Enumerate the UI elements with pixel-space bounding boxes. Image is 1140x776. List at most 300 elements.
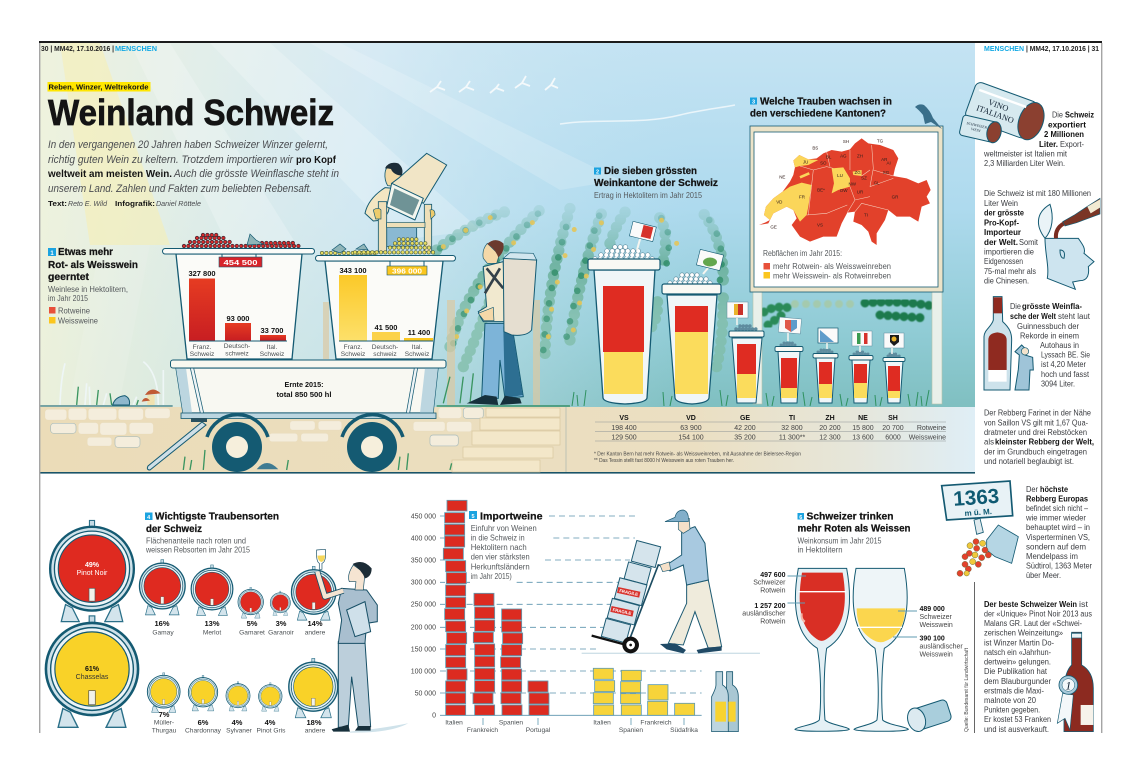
y axis labels: 450 000 bbox=[411, 514, 436, 520]
byline: Text: bbox=[48, 199, 67, 208]
barrel labels bbox=[76, 562, 326, 734]
heading 5: Hektolitern nach bbox=[471, 543, 527, 552]
text: highest vineyard: Südtirol, 1363 Meter bbox=[1026, 562, 1092, 570]
glass callouts: Weisswein bbox=[920, 652, 953, 658]
heading 2: Weinkantone der Schweiz bbox=[594, 177, 718, 189]
kicker: Reben, Winzer, Weltrekorde bbox=[48, 82, 148, 92]
glass callouts: 1 257 200 bbox=[754, 603, 786, 610]
glass callouts: 489 000 bbox=[920, 606, 945, 613]
grass under cups bbox=[572, 390, 929, 406]
icon: altitude sign with grapes: 1363 bbox=[953, 485, 1000, 511]
crate axis labels: Portugal bbox=[526, 727, 551, 734]
title: Weinland Schweiz bbox=[48, 92, 334, 133]
y axis labels: 0 bbox=[432, 712, 436, 720]
map of Switzerland: OW bbox=[840, 188, 848, 193]
intro text: weltweit am meisten Wein. bbox=[47, 168, 172, 180]
text: largest bottle: sche der Welt bbox=[1010, 312, 1056, 321]
sky background bbox=[40, 43, 975, 409]
barrel labels: 49% bbox=[85, 562, 100, 569]
map of Switzerland: ZH bbox=[857, 154, 863, 159]
chart: red wine bucket: 33 700 bbox=[261, 326, 283, 335]
text: smallest vineyard bbox=[984, 408, 1094, 466]
chart: white wine bucket: Deutsch- bbox=[372, 344, 398, 351]
table: canton yields: 154 100 bbox=[678, 434, 704, 442]
birds bbox=[430, 76, 558, 93]
source note: Quelle: Bundesamt für Landwirtschaft bbox=[964, 647, 970, 732]
heading 2: Die sieben grössten bbox=[604, 165, 697, 177]
glass callouts bbox=[742, 572, 963, 658]
crate axis labels: Frankreich bbox=[467, 727, 498, 734]
icon: altitude sign with grapes bbox=[942, 481, 1018, 576]
text: smallest vineyard: und notariell beglaubigt ist. bbox=[984, 457, 1074, 466]
text: per capita importer bbox=[984, 189, 1091, 286]
map of Switzerland: GL bbox=[874, 180, 880, 185]
table: canton yields: NE bbox=[858, 415, 868, 422]
table: canton yields: VD bbox=[686, 415, 696, 422]
heading 1: Rot- als Weisswein bbox=[48, 259, 138, 271]
cup: VD bbox=[662, 249, 724, 404]
icon: open head with wine bottle bbox=[1038, 198, 1100, 289]
chart: red wine bucket: 327 800 bbox=[188, 269, 216, 278]
text: smallest vineyard: von Saillon VS gilt mit 1,67 Qua- bbox=[984, 418, 1088, 428]
y axis gridlines bbox=[440, 516, 702, 715]
barrel labels: Müller- bbox=[154, 720, 174, 726]
text: export: weltmeister ist Italien mit bbox=[983, 150, 1068, 158]
text: export: 2,3 Milliarden Liter Wein. bbox=[984, 159, 1065, 168]
text: best Swiss wine bbox=[984, 600, 1092, 734]
glass callouts: Rotwein bbox=[760, 588, 786, 594]
byline: Daniel Röttele bbox=[156, 199, 201, 208]
text: export: 2 Millionen bbox=[1044, 130, 1084, 139]
table: canton yields: VS bbox=[619, 415, 629, 422]
winegrower with back basket bbox=[467, 240, 537, 405]
chart: red wine bucket: 454 500 bbox=[224, 258, 258, 267]
table: canton yields: 12 300 bbox=[819, 434, 841, 442]
text: best Swiss wine: Der beste Schweizer Wein bbox=[984, 600, 1077, 609]
map of Switzerland: SH bbox=[843, 139, 849, 144]
intro text bbox=[47, 139, 339, 195]
barrel labels: Garanoir bbox=[268, 630, 295, 636]
chart: wine canton cups bbox=[588, 221, 905, 404]
page frame and running heads: | MM42, 17.10.2016 | 31 bbox=[1026, 46, 1099, 53]
vertical divider bbox=[973, 582, 976, 733]
text: largest bottle: Die bbox=[1010, 302, 1021, 311]
icon: bird bbox=[915, 104, 942, 129]
crate axis labels: Italien bbox=[445, 720, 463, 726]
heading 4 bbox=[145, 510, 279, 554]
intro text: unserem Land. Zahlen und Fakten zum beliebten Rebensaft. bbox=[48, 183, 312, 195]
icon: award-winning bottle bbox=[1057, 632, 1093, 732]
barrel labels: Thurgau bbox=[152, 728, 177, 734]
table: canton yields: 20 700 bbox=[882, 425, 904, 432]
text: best Swiss wine: natsch ein «Jahrhun- bbox=[984, 648, 1051, 657]
map of Switzerland: TG bbox=[877, 138, 884, 143]
text: best Swiss wine: ist Winzer Martin Do- bbox=[984, 638, 1054, 648]
text: export bbox=[983, 110, 1094, 168]
byline: Reto E. Wild bbox=[68, 199, 108, 208]
text: best Swiss wine: ist bbox=[1079, 600, 1089, 609]
barrel labels: Chardonnay bbox=[185, 728, 222, 734]
icon: corks: SCHWEIZER bbox=[966, 121, 988, 130]
heading 3: 3 bbox=[752, 100, 755, 106]
text: export: exportiert bbox=[1048, 120, 1086, 130]
grape heaps bbox=[184, 234, 375, 253]
text: largest bottle: Guinnessbuch der bbox=[1017, 322, 1079, 331]
text: smallest vineyard: kleinster Rebberg der Welt, bbox=[995, 438, 1094, 446]
trailer: Ernte 2015: bbox=[284, 380, 324, 389]
text: best Swiss wine: der «Unique» Pinot Noir 2013 aus bbox=[984, 610, 1092, 618]
icon: wine bottles bbox=[712, 672, 738, 732]
heading 5: in die Schweiz in bbox=[471, 534, 525, 543]
text: best Swiss wine: Die Publikation hat bbox=[984, 667, 1048, 676]
text: smallest vineyard: der im Grundbuch eingetragen bbox=[984, 448, 1087, 456]
heading 2: 2 bbox=[596, 170, 599, 176]
map of Switzerland: UR bbox=[857, 189, 864, 194]
text: smallest vineyard: als bbox=[984, 438, 994, 446]
chart: white wine bucket: schweiz bbox=[373, 351, 397, 358]
chart: red wine bucket: Ital. bbox=[267, 344, 277, 351]
glass callouts: ausländischer bbox=[920, 644, 963, 650]
heading 6: 6 bbox=[799, 515, 802, 521]
text: best Swiss wine: zerischen Weinzeitung» bbox=[984, 628, 1064, 638]
map of Switzerland: TI bbox=[864, 213, 868, 218]
heading 5: 5 bbox=[471, 514, 475, 520]
heading 1: 1 bbox=[50, 251, 54, 257]
intro text: Auch die grösste Weinflasche steht in bbox=[173, 168, 339, 180]
red wine barrels bbox=[50, 520, 336, 622]
glass callouts: 390 100 bbox=[920, 636, 945, 642]
map of Switzerland: BS bbox=[812, 145, 818, 150]
heading 6: in Hektolitern bbox=[798, 546, 842, 554]
table: canton yields: 13 600 bbox=[852, 434, 874, 442]
text: largest bottle: hoch und fasst bbox=[1041, 370, 1090, 379]
heading 1: geerntet bbox=[48, 271, 89, 283]
icon: altitude sign with grapes: m ü. M. bbox=[964, 507, 992, 518]
y axis labels: 400 000 bbox=[411, 536, 436, 542]
text: highest vineyard: Visperterminen VS, bbox=[1026, 533, 1090, 542]
map of Switzerland: AI bbox=[887, 160, 891, 165]
barrel labels: andere bbox=[305, 728, 326, 734]
crate axis labels: Spanien bbox=[619, 727, 643, 734]
table: canton yields: 35 200 bbox=[734, 434, 756, 442]
barrel labels: Gamaret bbox=[239, 630, 265, 636]
map of Switzerland: NE bbox=[779, 174, 785, 179]
glass callouts: 497 600 bbox=[760, 572, 786, 579]
barrel labels: 18% bbox=[306, 718, 322, 727]
text: highest vineyard: sondern auf dem bbox=[1026, 542, 1086, 552]
chart: red wine bucket: schweiz bbox=[225, 350, 249, 358]
text: smallest vineyard: dratmeter und drei Rebstöcken bbox=[984, 428, 1087, 437]
page frame and running heads: 30 | MM42, 17.10.2016 | bbox=[41, 46, 114, 53]
text: best Swiss wine: Punkten gegeben. bbox=[984, 706, 1040, 714]
chart: white wine bucket: Schweiz bbox=[341, 351, 365, 358]
map of Switzerland: BL bbox=[826, 154, 832, 159]
heading 1: Weinlese in Hektolitern, bbox=[48, 285, 128, 294]
heading 3 bbox=[750, 96, 892, 120]
intro text: In den vergangenen 20 Jahren haben Schweizer Winzer gelernt, bbox=[48, 139, 328, 151]
chart: white wine bucket: 11 400 bbox=[408, 328, 430, 337]
text: highest vineyard bbox=[1025, 485, 1092, 580]
text: best Swiss wine: erstmals die Maxi- bbox=[984, 686, 1044, 696]
glass callouts: Rotwein bbox=[760, 618, 786, 626]
text: largest bottle: ist 4,20 Meter bbox=[1041, 360, 1086, 369]
text: highest vineyard: höchste bbox=[1040, 485, 1069, 494]
heading 4: der Schweiz bbox=[146, 523, 202, 535]
text: highest vineyard: Rebberg Europas bbox=[1026, 494, 1089, 504]
table: canton yields: Rotweine bbox=[917, 425, 946, 432]
crate axis labels: Italien bbox=[593, 720, 611, 726]
heading 5: Importweine bbox=[480, 510, 543, 522]
red wine glass bbox=[795, 568, 850, 731]
map of Switzerland: SZ bbox=[861, 175, 867, 180]
y axis labels: 50 000 bbox=[415, 690, 436, 698]
barrel labels: Pinot Gris bbox=[257, 728, 286, 734]
barrel labels: 14% bbox=[307, 619, 323, 628]
map of Switzerland: ZG bbox=[855, 170, 861, 175]
map of Switzerland: SG bbox=[883, 170, 890, 175]
y axis labels: 350 000 bbox=[411, 558, 436, 564]
map of Switzerland: FR bbox=[799, 194, 806, 199]
byline bbox=[48, 199, 201, 208]
delivery man with hand truck: FRAGILE bbox=[612, 607, 632, 616]
text: highest vineyard: Mendelpass im bbox=[1026, 552, 1078, 561]
panel: consumption glasses bbox=[742, 510, 963, 734]
table: canton yields: Weissweine bbox=[909, 434, 946, 442]
barrel labels: Pinot Noir bbox=[77, 570, 108, 577]
heading 6: Weinkonsum im Jahr 2015 bbox=[798, 536, 882, 546]
barrel labels: Sylvaner bbox=[226, 728, 253, 734]
wooden vine posts bbox=[323, 300, 540, 405]
panel: imports chart bbox=[411, 500, 760, 734]
chart: white wine bucket: Ital. bbox=[412, 344, 422, 351]
text: highest vineyard: über Meer. bbox=[1026, 571, 1061, 580]
table: canton yields: 63 900 bbox=[680, 425, 702, 432]
icon: largest bottle with man bbox=[984, 297, 1033, 390]
map of Switzerland: SO bbox=[820, 161, 827, 166]
chart: white wine bucket: 41 500 bbox=[375, 323, 397, 332]
text: export: Export- bbox=[1060, 140, 1084, 149]
text: best Swiss wine: dem Blauburgunder bbox=[984, 677, 1051, 686]
vineyard rows bbox=[437, 205, 723, 367]
crate axis labels: Südafrika bbox=[670, 727, 698, 734]
heading 1 bbox=[48, 246, 138, 326]
text: per capita importer: 75-mal mehr als bbox=[984, 267, 1036, 276]
y axis labels: 100 000 bbox=[411, 668, 436, 676]
glass callouts: Schweizer bbox=[753, 580, 786, 586]
cup: ZH bbox=[813, 328, 838, 403]
text: largest bottle: Lyssach BE. Sie bbox=[1041, 350, 1090, 360]
map of Switzerland: BE* bbox=[817, 187, 825, 192]
map of Switzerland: AG bbox=[840, 154, 847, 159]
map of Switzerland: GE bbox=[770, 225, 777, 230]
yellow wine crate stacks bbox=[593, 668, 695, 715]
billboard with map bbox=[750, 126, 943, 292]
byline: Infografik: bbox=[115, 199, 155, 208]
crate axis labels: Spanien bbox=[499, 720, 523, 726]
y axis labels: 250 000 bbox=[411, 602, 436, 608]
cup: VS bbox=[588, 221, 660, 404]
barrel labels: 16% bbox=[154, 619, 170, 628]
text: highest vineyard: befindet sich nicht – bbox=[1026, 504, 1088, 513]
chart: white wine bucket: 343 100 bbox=[339, 266, 367, 275]
grape picker with hopper bbox=[355, 153, 447, 252]
text: largest bottle: Rekorde in einem bbox=[1020, 332, 1079, 340]
text: per capita importer: Pro-Kopf- bbox=[984, 218, 1019, 228]
chart: red wine bucket: Franz. bbox=[193, 344, 212, 351]
trailer bbox=[147, 360, 446, 472]
table: canton yields: 11 300** bbox=[779, 434, 805, 442]
barrel labels: 6% bbox=[198, 718, 209, 727]
table: canton yields: SH bbox=[888, 415, 898, 422]
icon: corks: VINO bbox=[987, 98, 1010, 113]
billboard posts bbox=[753, 292, 942, 404]
barrel labels: 7% bbox=[159, 710, 170, 719]
table: canton yields: 129 500 bbox=[611, 434, 637, 442]
cup: NE bbox=[849, 331, 873, 403]
map of Switzerland bbox=[759, 138, 931, 245]
text: largest bottle: steht laut bbox=[1058, 312, 1091, 321]
table: canton yields: ZH bbox=[825, 415, 835, 422]
delivery man with hand truck: FRAGILE bbox=[619, 588, 639, 597]
intro text: pro Kopf bbox=[296, 154, 336, 166]
grass, snail and mushrooms bbox=[39, 362, 570, 470]
text: best Swiss wine: Er kostet 53 Franken bbox=[984, 715, 1051, 724]
trailer: total 850 500 hl bbox=[276, 390, 332, 399]
text: export: Schweiz bbox=[1065, 110, 1094, 120]
table: canton yields: 32 800 bbox=[781, 425, 803, 432]
heading 6: Schweizer trinken bbox=[806, 510, 894, 522]
text: highest vineyard: behauptet wird – in bbox=[1026, 523, 1090, 532]
text: per capita importer: der grösste bbox=[984, 208, 1024, 218]
y axis labels: 200 000 bbox=[411, 624, 436, 632]
text: per capita importer: Importeur bbox=[984, 228, 1021, 237]
map of Switzerland: AR bbox=[881, 157, 888, 162]
table: canton yields: * Der Kanton Bern hat mehr Rotwein- als Weissweinreben, mit Ausnahme der Bielersee-Region bbox=[594, 452, 801, 458]
glass callouts: Schweizer bbox=[920, 614, 952, 621]
heading 1: Etwas mehr bbox=[58, 246, 113, 258]
icon: corks bbox=[959, 81, 1049, 144]
heading 2: Ertrag in Hektolitern im Jahr 2015 bbox=[594, 191, 702, 200]
chart: white wine bucket bbox=[316, 256, 456, 359]
heading 5 bbox=[469, 510, 543, 581]
map legend bbox=[763, 249, 891, 280]
text: smallest vineyard: Der Rebberg Farinet in der Nähe bbox=[984, 408, 1091, 418]
y axis labels bbox=[411, 514, 436, 720]
heading 5: Herkunftsländern bbox=[471, 562, 530, 571]
white bottom mask bbox=[41, 733, 371, 753]
text: largest bottle: Autohaus in bbox=[1040, 341, 1079, 350]
text: best Swiss wine: dertwein» gelungen. bbox=[984, 658, 1051, 666]
icon: award-winning bottle: 1 bbox=[1065, 678, 1071, 692]
text: highest vineyard: Der bbox=[1026, 485, 1038, 494]
cup: TI bbox=[775, 317, 803, 403]
text: highest vineyard: wie immer wieder bbox=[1025, 514, 1086, 522]
y axis labels: 300 000 bbox=[411, 580, 436, 586]
heading 6 bbox=[798, 510, 910, 554]
delivery man with hand truck bbox=[582, 510, 760, 653]
map legend: Rebflächen im Jahr 2015: bbox=[763, 249, 842, 258]
heading 3: den verschiedene Kantonen? bbox=[750, 108, 886, 120]
icon: corks: WEIN bbox=[971, 127, 981, 133]
text: best Swiss wine: Malans GR. Laut der «Schwei- bbox=[984, 619, 1082, 628]
map of Switzerland: JU bbox=[803, 159, 808, 164]
table: canton yields: ** Das Tessin stellt fast 8000 hl Weisswein aus roten Trauben her. bbox=[594, 458, 734, 464]
text: export: Liter. bbox=[1039, 140, 1058, 149]
heading 1: im Jahr 2015 bbox=[48, 294, 88, 303]
barrel labels: 5% bbox=[247, 619, 258, 628]
chart: white wine bucket: Schweiz bbox=[405, 351, 429, 358]
table: canton yields: 198 400 bbox=[611, 425, 637, 432]
table: canton yields: TI bbox=[789, 415, 795, 422]
table: canton yields: 20 200 bbox=[819, 425, 841, 432]
text: per capita importer: Die Schweiz ist mit 180 Millionen bbox=[984, 189, 1091, 198]
heading 4: Flächenanteile nach roten und bbox=[146, 536, 246, 546]
chart: red wine bucket: 93 000 bbox=[227, 314, 249, 323]
barrel labels: 13% bbox=[204, 619, 220, 628]
barrel labels: 3% bbox=[276, 619, 287, 628]
text: per capita importer: der Welt. bbox=[984, 238, 1018, 247]
text: largest bottle: grösste Weinfla- bbox=[1022, 302, 1082, 311]
white wine glass bbox=[853, 568, 908, 731]
heading 2 bbox=[594, 165, 718, 200]
cup: GE bbox=[727, 302, 764, 403]
map of Switzerland: NW bbox=[849, 182, 857, 187]
table: canton yields: 42 200 bbox=[734, 425, 756, 432]
chart: red wine bucket: Deutsch- bbox=[224, 343, 250, 350]
map of Switzerland: GR bbox=[892, 194, 899, 199]
crate axis labels: Frankreich bbox=[640, 720, 672, 726]
icon: corks: ITALIANO bbox=[975, 103, 1015, 125]
text: largest bottle bbox=[1010, 302, 1091, 388]
cup: SH bbox=[883, 333, 905, 403]
crate axis labels bbox=[445, 718, 698, 734]
table: canton yields bbox=[594, 415, 946, 464]
glass callouts: ausländischer bbox=[742, 610, 786, 618]
chart: red wine bucket: Schweiz bbox=[260, 351, 284, 358]
map of Switzerland: VS bbox=[817, 223, 823, 228]
barrel labels: Merlot bbox=[203, 630, 221, 636]
heading 1: Rotweine bbox=[58, 306, 91, 316]
page frame and running heads: MENSCHEN bbox=[984, 46, 1024, 53]
stone wall bbox=[40, 407, 975, 474]
text: per capita importer: importieren die bbox=[984, 248, 1035, 256]
map legend: mehr Weisswein- als Rotweinreben bbox=[773, 272, 891, 280]
heading 4: weissen Rebsorten im Jahr 2015 bbox=[145, 546, 250, 554]
barrel labels: Chasselas bbox=[76, 674, 109, 681]
heading 5: im Jahr 2015) bbox=[471, 572, 512, 581]
map of Switzerland: LU bbox=[837, 173, 843, 178]
text: per capita importer: Somit bbox=[1019, 238, 1039, 247]
y axis labels: 150 000 bbox=[411, 646, 436, 654]
leaves under billboard bbox=[764, 302, 932, 325]
text: best Swiss wine: und ist ausverkauft. bbox=[984, 725, 1049, 734]
heading 4: 4 bbox=[147, 515, 151, 521]
heading 4: Wichtigste Traubensorten bbox=[155, 510, 279, 522]
text: per capita importer: Liter Wein bbox=[984, 199, 1018, 208]
red wine crate stacks bbox=[443, 500, 549, 715]
icon: cork bbox=[905, 698, 953, 734]
barrel labels: andere bbox=[305, 630, 326, 636]
table: canton yields: 15 800 bbox=[852, 425, 874, 432]
chart: red wine bucket: Schweiz bbox=[190, 351, 214, 358]
text: per capita importer: Eidgenossen bbox=[984, 257, 1023, 266]
chart: white wine bucket: Franz. bbox=[344, 344, 363, 351]
barrel labels: 61% bbox=[85, 666, 100, 673]
page frame and running heads: MENSCHEN bbox=[115, 46, 157, 53]
text: export: Die bbox=[1052, 110, 1063, 120]
text: per capita importer: die Chinesen. bbox=[984, 276, 1029, 286]
chart: red wine bucket bbox=[162, 248, 314, 359]
